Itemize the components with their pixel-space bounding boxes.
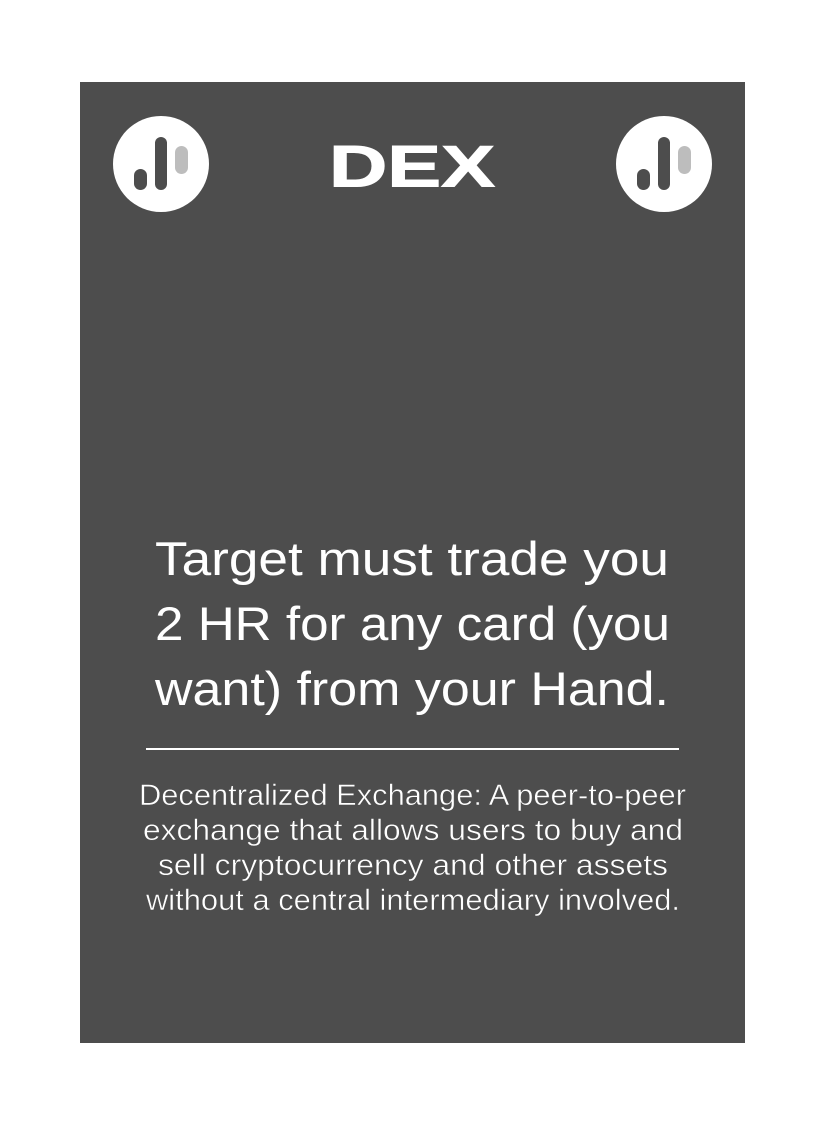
text block: definition: sell cryptocurrency and other assets — [158, 849, 668, 882]
icon: left logo — [113, 116, 209, 212]
heading: card effect — [154, 532, 670, 715]
heading: card effect: Target must trade you — [155, 532, 669, 585]
divider — [146, 748, 679, 750]
title: DEX — [329, 134, 495, 200]
heading: card effect: want) from your Hand. — [154, 662, 669, 715]
text block: definition: Decentralized Exchange: A peer-to-peer — [139, 779, 686, 812]
text block: definition: exchange that allows users to buy and — [143, 814, 683, 847]
text block: definition: without a central intermediary involved. — [145, 884, 680, 917]
panel: card — [80, 82, 745, 1043]
icon: right logo — [616, 116, 712, 212]
heading: card effect: 2 HR for any card (you — [155, 597, 670, 650]
text block: definition — [139, 779, 686, 917]
